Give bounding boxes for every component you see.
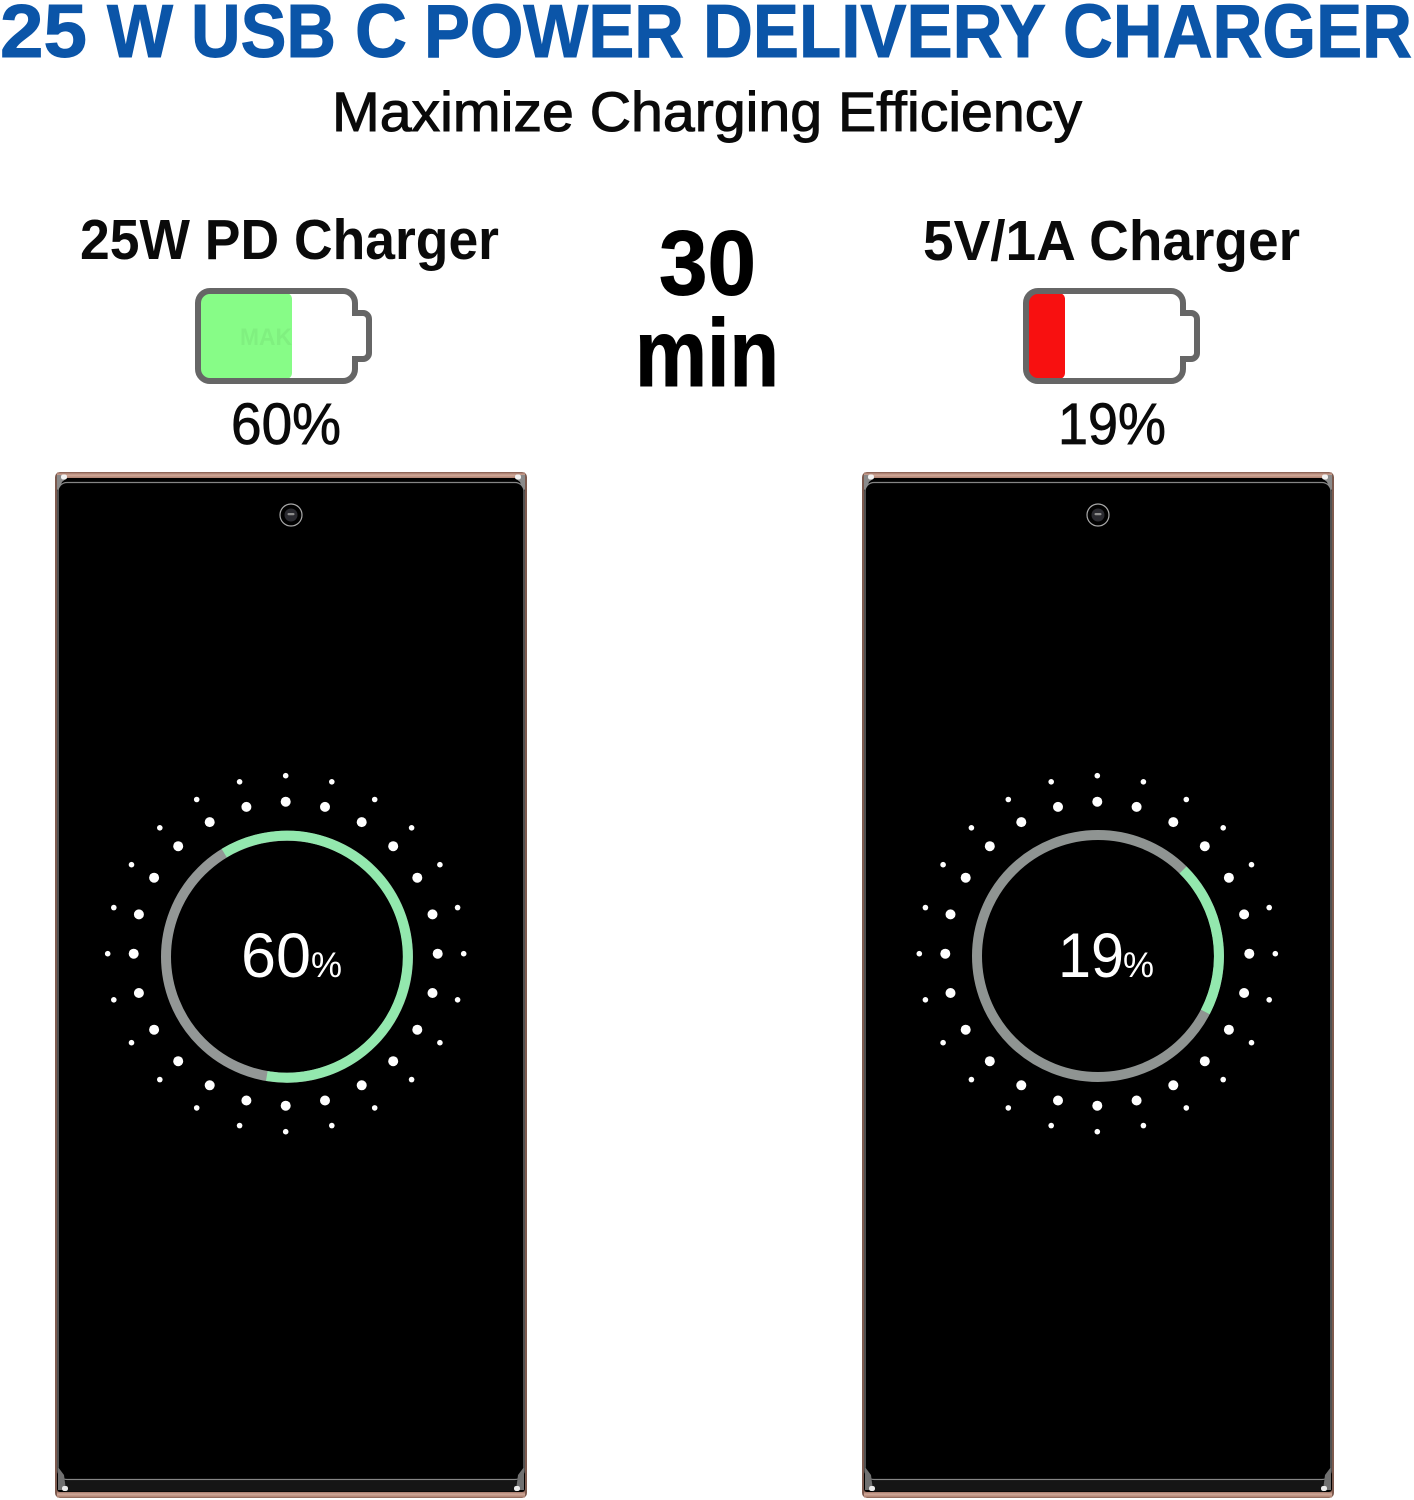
dotted halo right [917, 773, 1278, 1134]
panel: left phone at 60 percent [55, 472, 527, 1498]
subtitle: Maximize Charging Efficiency [332, 80, 1082, 143]
phone body left [55, 472, 527, 1498]
ring label 19 percent: % [1123, 946, 1154, 985]
icon: battery 19 percent [1026, 291, 1197, 381]
panel: 5V/1A charger summary [923, 209, 1300, 457]
time value 30: 30 [659, 212, 756, 314]
value: 19 percent: 19% [1058, 392, 1166, 457]
panel: charging time [635, 212, 779, 407]
panel: 25W PD charger summary [80, 208, 499, 457]
heading: 25W PD Charger: 25W PD Charger [80, 208, 499, 272]
dotted halo left [105, 773, 467, 1134]
phone body right [862, 472, 1334, 1498]
time unit min: min [635, 300, 779, 407]
icon: battery 60 percent [198, 291, 369, 381]
heading: 5V/1A Charger: 5V/1A Charger [923, 209, 1300, 273]
ring label 60 percent [241, 921, 342, 991]
icon: battery 60 percent: MAK [240, 324, 293, 351]
progress ring 19 percent [977, 835, 1219, 1077]
ring label 60 percent: % [311, 946, 342, 985]
panel: right phone at 19 percent [862, 472, 1334, 1498]
progress ring 60 percent [166, 836, 408, 1078]
value: 60 percent: 60% [231, 392, 341, 457]
ring label 19 percent: 19 [1058, 921, 1124, 991]
ring label 60 percent: 60 [241, 921, 311, 991]
title [0, 0, 1412, 73]
